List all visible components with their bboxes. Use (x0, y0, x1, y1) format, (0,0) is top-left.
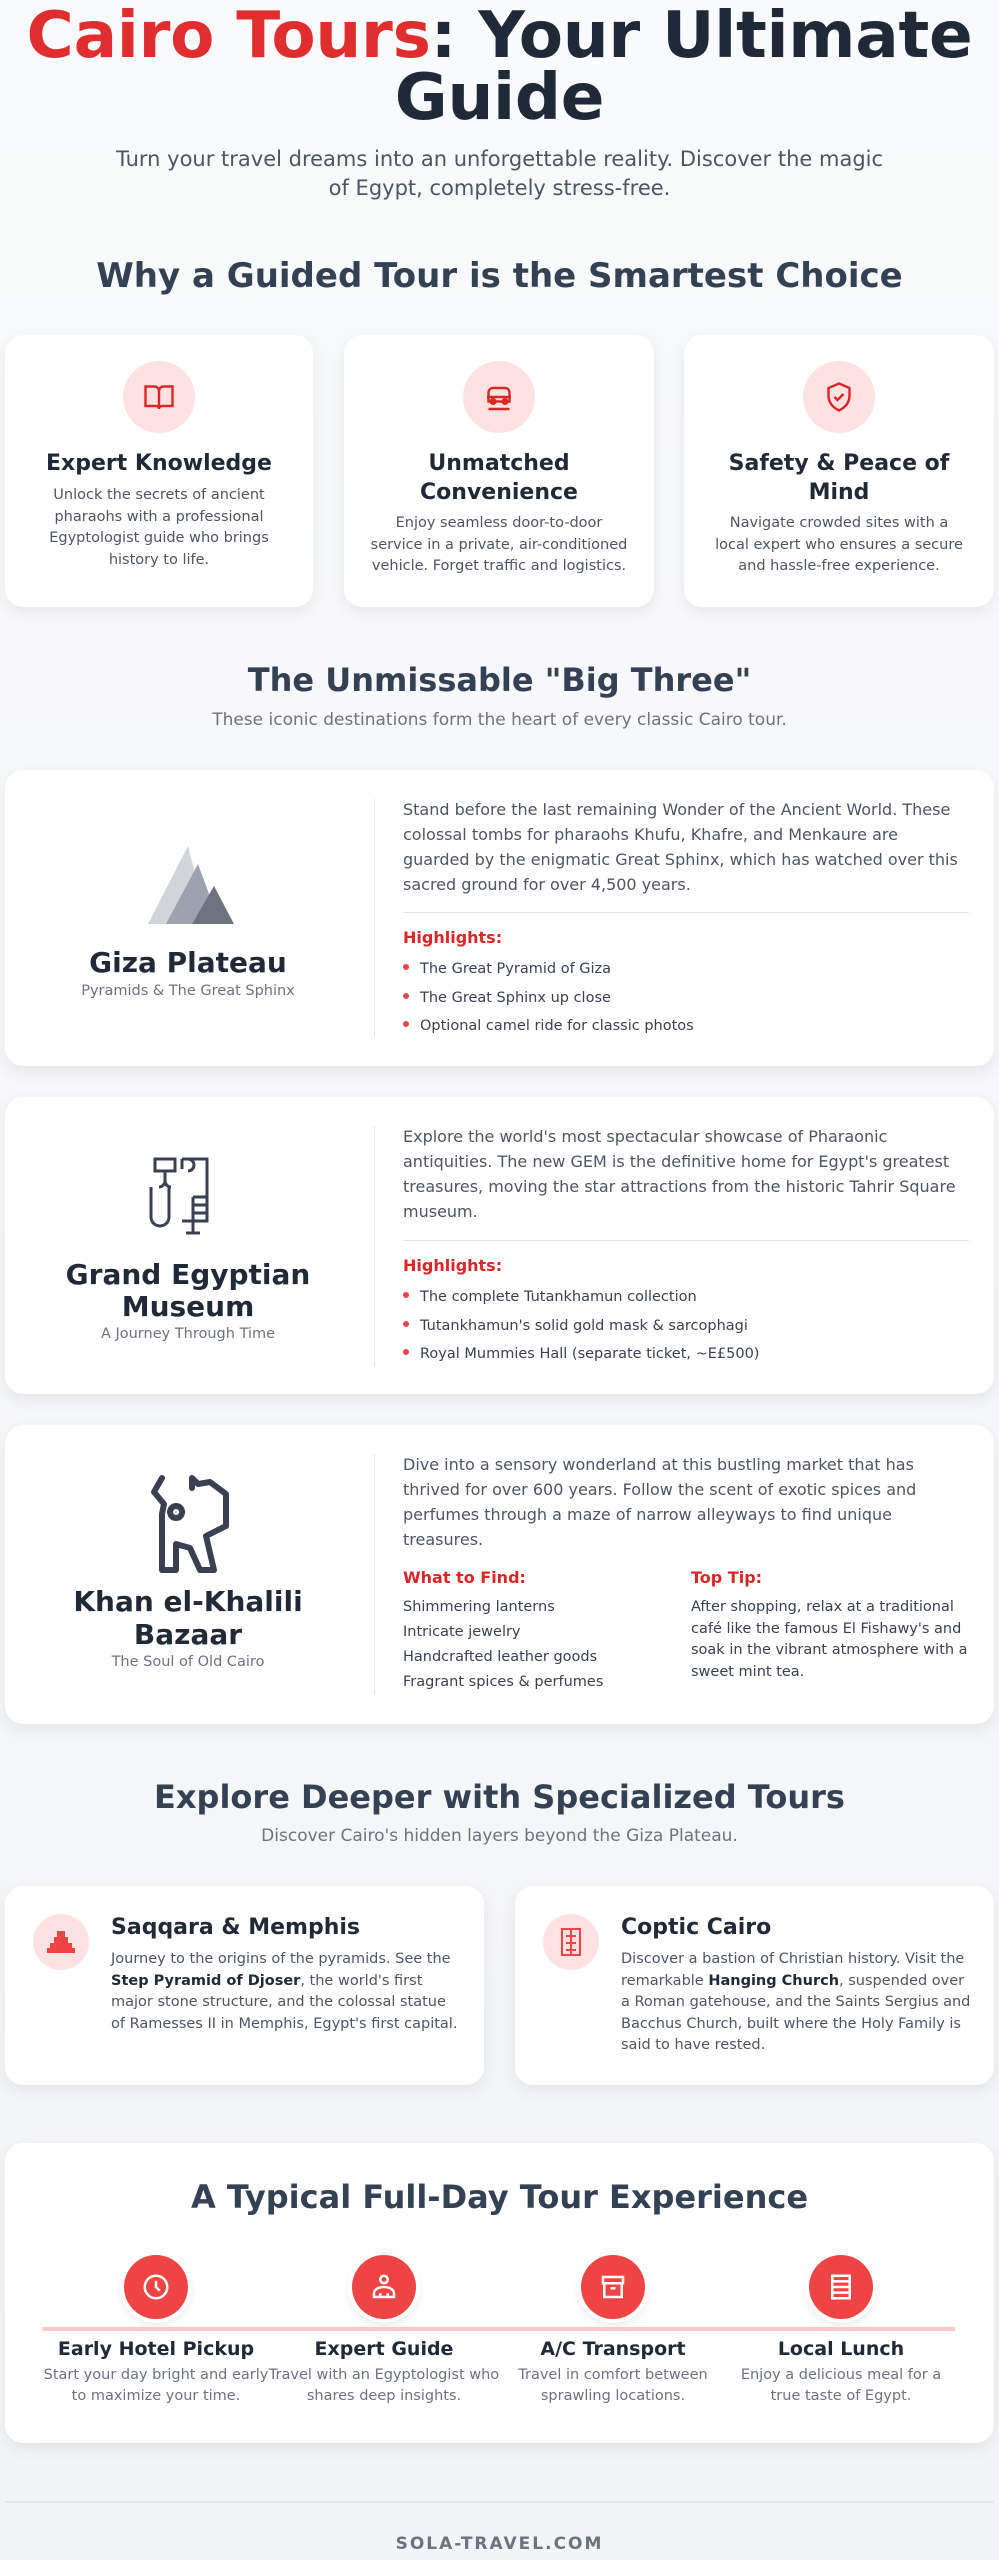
subtitle: of Egypt, completely stress-free. (329, 176, 670, 200)
museum title: Grand Egyptian (66, 1258, 310, 1291)
text: Journey to the origins of the pyramids. See the Step Pyramid of Djoser, the world's first major stone structure, and the colossal statue of Ramesses II in Memphis, Egypt's first capital. (111, 1951, 457, 2032)
what to find: Intricate jewelry (403, 1624, 521, 1640)
icon: book (123, 361, 195, 433)
step: guide (268, 2255, 499, 2404)
icon: car (463, 361, 535, 433)
subtitle (116, 147, 883, 200)
timeline title: A Typical Full-Day Tour Experience (191, 2178, 808, 2216)
card title (420, 451, 578, 505)
panel: full-day timeline (5, 2143, 994, 2443)
card title: Convenience (420, 480, 578, 505)
step: lunch: Enjoy a delicious meal for a (741, 2367, 941, 2383)
step: pickup: Early Hotel Pickup (58, 2338, 254, 2360)
heading: big three: The Unmissable "Big Three" (248, 661, 751, 699)
icon: church (543, 1914, 599, 1970)
what to find: Handcrafted leather goods (403, 1649, 597, 1665)
highlights heading: Highlights: (403, 1256, 502, 1275)
card title: Mind (809, 480, 869, 505)
step: transport (518, 2255, 708, 2404)
card title (729, 451, 950, 505)
highlights list: Optional camel ride for classic photos (420, 1018, 694, 1034)
card title: Expert Knowledge (46, 451, 272, 476)
subheading: These iconic destinations form the heart of every classic Cairo tour. (212, 710, 787, 730)
title: Cairo Tours: Your Ultimate (27, 0, 972, 73)
subtitle: Turn your travel dreams into an unforgettable reality. Discover the magic (116, 147, 883, 171)
highlights list: The Great Pyramid of Giza (420, 961, 611, 977)
panel: giza (5, 770, 994, 1066)
step: guide: Travel with an Egyptologist who shares deep insights. (269, 2367, 499, 2404)
highlights list: Tutankhamun's solid gold mask & sarcophagi (420, 1318, 748, 1334)
panel: bazaar (5, 1425, 994, 1724)
bazaar description: Dive into a sensory wonderland at this bustling market that has thrived for over 600 years. Follow the scent of exotic spices and perfumes through a maze of narrow alleyways to find unique treasures. (403, 1455, 916, 1549)
card title: Safety & Peace of (729, 451, 949, 476)
subheading: Discover Cairo's hidden layers beyond the Giza Plateau. (261, 1826, 738, 1846)
panel: museum (5, 1097, 994, 1394)
highlights list: The complete Tutankhamun collection (420, 1289, 697, 1305)
what to find: Fragrant spices & perfumes (403, 1674, 603, 1690)
what to find (403, 1568, 603, 1690)
step: transport: A/C Transport (540, 2338, 686, 2360)
museum title (66, 1258, 310, 1323)
icon: clock (124, 2255, 188, 2319)
step: pickup: Start your day bright and early to maximize your time. (44, 2367, 268, 2404)
highlights list: Royal Mummies Hall (separate ticket, ~E£500) (420, 1346, 759, 1362)
bazaar title: Khan el-Khalili (73, 1585, 303, 1618)
highlights list: The Great Sphinx up close (420, 990, 611, 1006)
panel: safety (684, 335, 994, 607)
text: Discover a bastion of Christian history. Visit the remarkable Hanging Church, suspended over a Roman gatehouse, and the Saints Sergius and Bacchus Church, built where the Holy Family is said to have rested. (621, 1951, 970, 2053)
step: guide: Expert Guide (315, 2338, 453, 2360)
highlights list (403, 1289, 759, 1362)
what to find: Shimmering lanterns (403, 1599, 555, 1615)
step: pickup (44, 2255, 268, 2404)
panel: expert knowledge (5, 335, 313, 607)
icon: box (581, 2255, 645, 2319)
icon: shield (803, 361, 875, 433)
bazaar title: Bazaar (134, 1618, 242, 1651)
step: lunch: Local Lunch (778, 2338, 904, 2360)
heading: specialized tours: Explore Deeper with Specialized Tours (154, 1778, 845, 1816)
giza subtitle: Pyramids & The Great Sphinx (81, 983, 295, 999)
heading: why guided tour: Why a Guided Tour is the Smartest Choice (96, 256, 903, 296)
icon: menu (809, 2255, 873, 2319)
museum title: Museum (122, 1290, 254, 1323)
top tip: Top Tip: (691, 1568, 762, 1587)
step: lunch (741, 2255, 941, 2404)
bazaar subtitle: The Soul of Old Cairo (112, 1654, 264, 1670)
icon: step pyramid (33, 1914, 89, 1970)
title: Coptic Cairo (621, 1915, 771, 1940)
museum subtitle: A Journey Through Time (101, 1326, 275, 1342)
title: Guide (395, 60, 604, 135)
panel: coptic cairo (515, 1886, 994, 2085)
icon: camel (150, 1475, 229, 1573)
top tip: After shopping, relax at a traditional café like the famous El Fishawy's and soak in the vibrant atmosphere with a sweet mint tea. (691, 1599, 968, 1680)
highlights list (403, 961, 694, 1034)
footer: SOLA-TRAVEL.COM (396, 2534, 603, 2554)
icon: museum artifacts (150, 1158, 208, 1234)
step: transport: Travel in comfort between sprawling locations. (518, 2367, 708, 2404)
step: lunch: true taste of Egypt. (771, 2388, 911, 2404)
panel: saqqara (5, 1886, 484, 2085)
title (27, 0, 972, 135)
title: Saqqara & Memphis (111, 1915, 360, 1940)
card text: Enjoy seamless door-to-door service in a private, air-conditioned vehicle. Forget traffic and logistics. (371, 515, 627, 574)
panel: convenience (344, 335, 654, 607)
icon: pyramids (148, 846, 234, 924)
museum description: Explore the world's most spectacular showcase of Pharaonic antiquities. The new GEM is the definitive home for Egypt's greatest treasures, moving the star attractions from the historic Tahrir Square museum. (403, 1127, 956, 1221)
card text: Navigate crowded sites with a local expert who ensures a secure and hassle-free experience. (715, 515, 963, 574)
icon: guide (352, 2255, 416, 2319)
giza title: Giza Plateau (89, 946, 287, 979)
what to find: What to Find: (403, 1568, 526, 1587)
bazaar title (73, 1585, 303, 1651)
card text: Unlock the secrets of ancient pharaohs with a professional Egyptologist guide who brings history to life. (49, 487, 269, 568)
highlights heading: Highlights: (403, 928, 502, 947)
card title: Unmatched (428, 451, 570, 476)
giza description: Stand before the last remaining Wonder of the Ancient World. These colossal tombs for pharaohs Khufu, Khafre, and Menkaure are guarded by the enigmatic Great Sphinx, which has watched over this sacred ground for over 4,500 years. (403, 800, 958, 894)
